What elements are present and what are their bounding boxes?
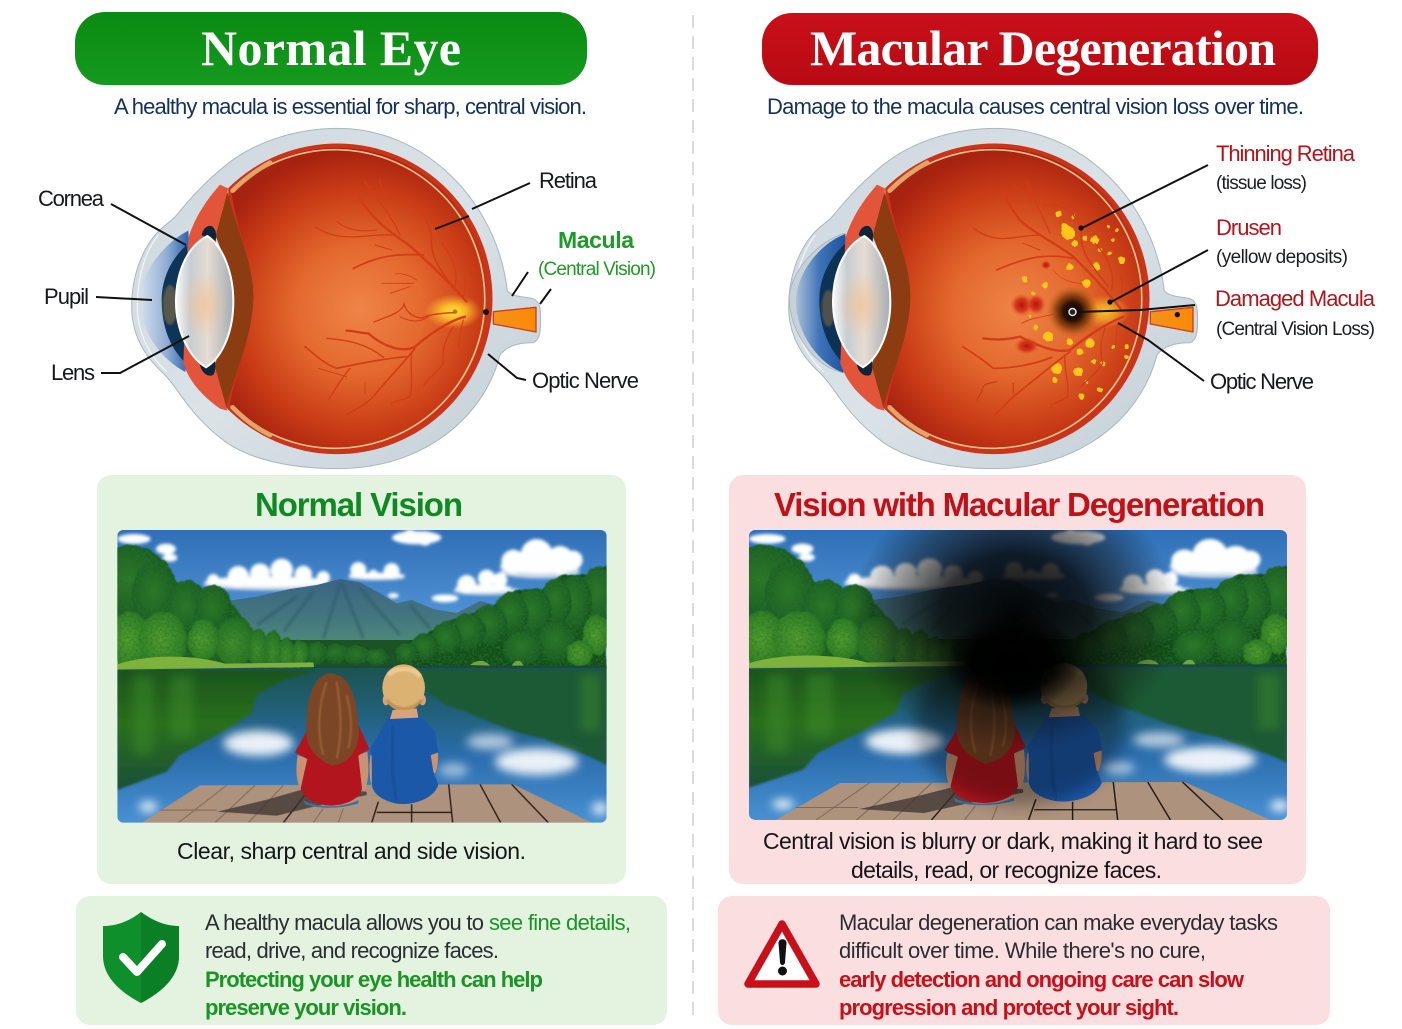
banner: Macular Degeneration — [762, 13, 1318, 85]
note text — [839, 910, 1278, 1020]
icon: shield with check — [103, 912, 179, 1003]
leader lines: healthy eye — [96, 183, 551, 380]
label: yellow deposits: (yellow deposits) — [1216, 247, 1348, 268]
label: Pupil: Pupil — [44, 284, 89, 309]
label: tissue loss: (tissue loss) — [1216, 173, 1307, 194]
icon: warning triangle — [748, 924, 816, 984]
panel: vision with macular degeneration — [724, 475, 1306, 884]
note text: early detection and ongoing care can slow — [839, 967, 1245, 992]
heading: Vision with Macular Degeneration: Vision with Macular Degeneration — [774, 486, 1265, 523]
label: Macula: Macula — [558, 227, 634, 253]
note text: see fine details, — [489, 910, 631, 935]
banner: Macular Degeneration: Macular Degeneration — [810, 20, 1276, 76]
label: Central Vision: (Central Vision) — [538, 259, 656, 280]
note text: Macular degeneration can make everyday tasks — [839, 910, 1278, 935]
damaged macula — [1047, 286, 1130, 338]
panel: macular degeneration column — [718, 13, 1376, 1025]
caption: Clear, sharp central and side vision. — [177, 838, 526, 864]
subtitle: central vision loss: Damage to the macula causes central vision loss over time. — [767, 94, 1304, 119]
photo: scene with dark central blur — [748, 530, 1287, 820]
note text — [205, 910, 631, 1020]
heading: Normal Vision: Normal Vision — [255, 486, 463, 523]
label: Thinning Retina: Thinning Retina — [1216, 141, 1356, 166]
panel: everyday tasks warning — [718, 896, 1330, 1025]
label: Lens: Lens — [51, 360, 95, 385]
divider line — [692, 15, 694, 1020]
label: Drusen: Drusen — [1216, 215, 1282, 240]
subtitle: healthy macula: A healthy macula is essential for sharp, central vision. — [114, 94, 587, 119]
note text: difficult over time. While there's no cure, — [839, 938, 1206, 963]
caption — [763, 828, 1263, 883]
note text: A healthy macula allows you to — [205, 910, 484, 935]
retinal vessels — [963, 180, 1123, 415]
diagram: healthy eye anatomy — [38, 128, 656, 469]
photo: clear lake scene — [95, 529, 617, 824]
diagram: damaged eye anatomy — [789, 128, 1376, 469]
caption: details, read, or recognize faces. — [851, 857, 1162, 883]
label: Cornea: Cornea — [38, 186, 105, 211]
leader lines: damaged eye — [1076, 165, 1208, 381]
panel: normal eye column — [38, 12, 667, 1025]
label: Central Vision Loss: (Central Vision Loss) — [1216, 319, 1375, 340]
markers on leader lines — [1069, 225, 1113, 316]
retinal vessels — [305, 178, 467, 415]
banner: Normal Eye: Normal Eye — [201, 20, 461, 76]
note text: Protecting your eye health can help — [205, 967, 543, 992]
drusen deposits — [1022, 211, 1129, 399]
note text: preserve your vision. — [205, 995, 407, 1020]
hemorrhage spots — [1010, 260, 1051, 355]
macula glow — [425, 294, 482, 329]
label: Damaged Macula: Damaged Macula — [1215, 286, 1376, 311]
label: Optic Nerve: Optic Nerve — [1210, 369, 1314, 394]
panel: healthy macula note — [76, 896, 667, 1025]
note text: progression and protect your sight. — [839, 995, 1179, 1020]
note text: read, drive, and recognize faces. — [205, 938, 499, 963]
caption: Central vision is blurry or dark, making it hard to see — [763, 828, 1263, 854]
optic nerve marker — [1175, 312, 1180, 317]
label: Optic Nerve: Optic Nerve — [532, 368, 639, 393]
banner: Normal Eye — [75, 12, 587, 85]
panel: normal vision — [95, 475, 626, 884]
label: Retina: Retina — [539, 168, 598, 193]
